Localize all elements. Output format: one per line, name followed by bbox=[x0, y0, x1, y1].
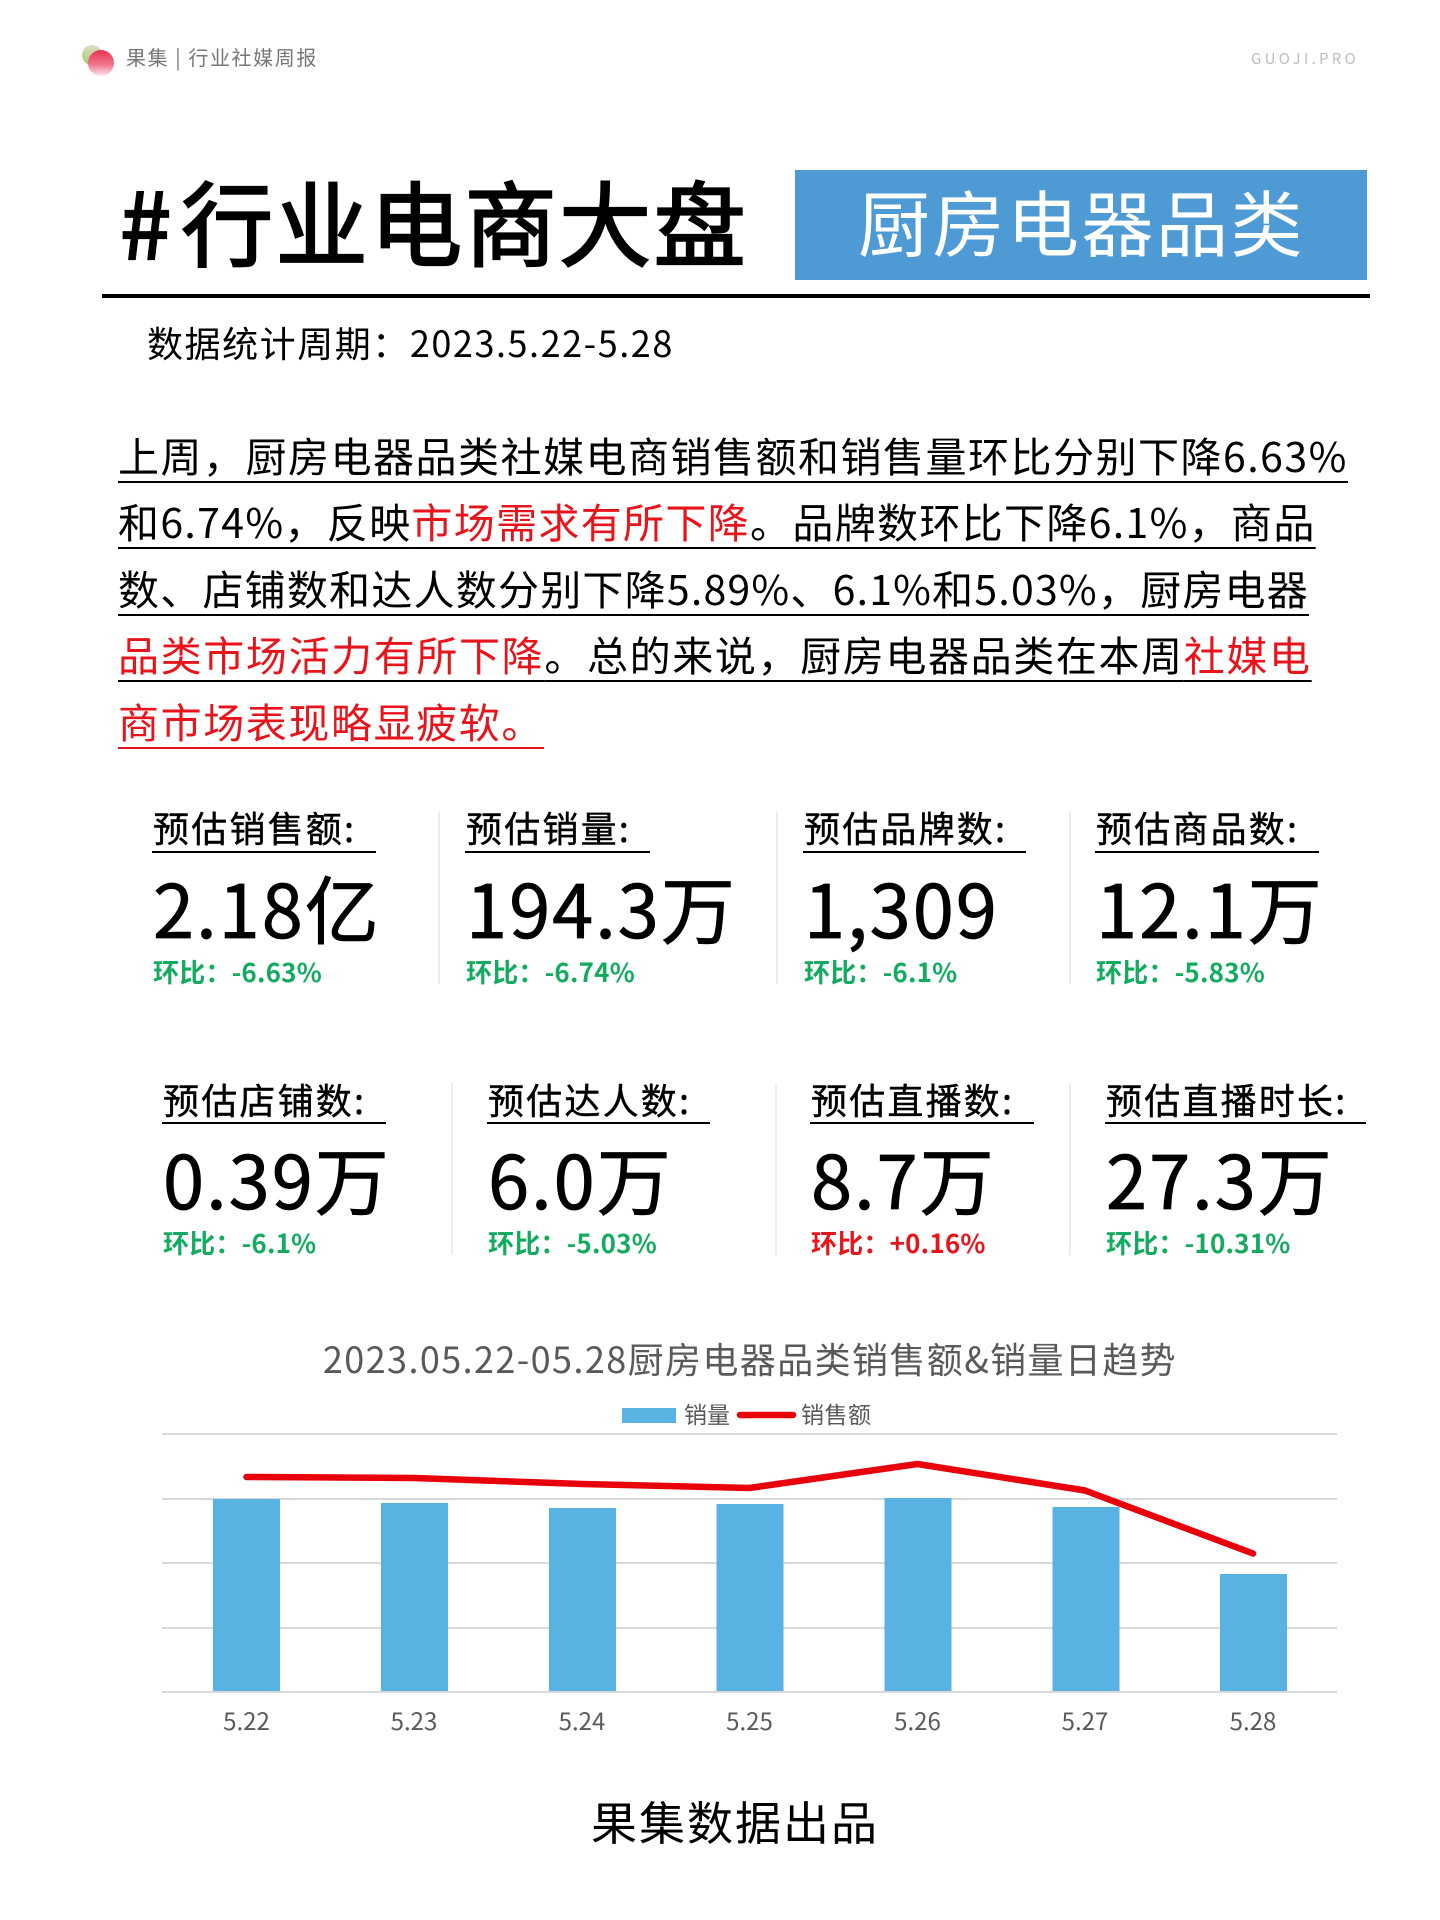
title: #行业电商大盘 bbox=[120, 153, 748, 286]
stat: stores bbox=[162, 1073, 391, 1261]
stat: live streams: 预估直播数: bbox=[811, 1073, 1014, 1125]
stat: live duration: 预估直播时长: bbox=[1106, 1073, 1347, 1125]
stat: products: 环比：-5.83% bbox=[1096, 953, 1265, 990]
x axis labels: 5.26 bbox=[894, 1702, 941, 1737]
line 5: 商市场表现略显疲软。 bbox=[118, 690, 544, 750]
stat: products: 预估商品数: bbox=[1096, 801, 1299, 853]
stat: brands: 1,309 bbox=[804, 853, 999, 960]
stat: stores: 预估店铺数: bbox=[163, 1073, 366, 1125]
stat: sales amount: 2.18亿 bbox=[153, 853, 381, 960]
chart title: 2023.05.22-05.28厨房电器品类销售额&销量日趋势 bbox=[323, 1332, 1177, 1384]
x axis labels: 5.28 bbox=[1230, 1702, 1276, 1737]
stat: live streams: 环比：+0.16% bbox=[811, 1224, 986, 1261]
stat: live duration bbox=[1105, 1073, 1366, 1261]
legend: 销售额 bbox=[801, 1396, 872, 1430]
x axis labels: 5.22 bbox=[223, 1702, 270, 1737]
summary paragraph bbox=[118, 424, 1348, 750]
stat: products: 12.1万 bbox=[1096, 853, 1324, 960]
site url: GUOJI.PRO bbox=[1251, 48, 1359, 69]
stat: influencers: 6.0万 bbox=[488, 1124, 673, 1231]
header brand: logo and name bbox=[82, 42, 318, 76]
legend bbox=[622, 1396, 872, 1430]
stat: sales volume: 194.3万 bbox=[466, 853, 737, 960]
stat: brands: 预估品牌数: bbox=[804, 801, 1007, 853]
stat: stores: 环比：-6.1% bbox=[163, 1224, 316, 1261]
x axis labels: 5.23 bbox=[391, 1702, 437, 1737]
line 3: 数、店铺数和达人数分别下降5.89%、6.1%和5.03%，厨房电器 bbox=[118, 557, 1309, 617]
stat: influencers bbox=[487, 1073, 710, 1261]
stat: brands bbox=[803, 801, 1026, 990]
x axis labels bbox=[223, 1702, 1276, 1737]
category tag bbox=[795, 170, 1367, 280]
bars: sales volume bbox=[213, 1498, 1287, 1691]
stat: live duration: 27.3万 bbox=[1106, 1124, 1334, 1231]
stat: sales volume: 环比：-6.74% bbox=[466, 953, 635, 990]
date range: 数据统计周期：2023.5.22-5.28 bbox=[147, 316, 674, 368]
stat: brands: 环比：-6.1% bbox=[804, 953, 957, 990]
stat: stores: 0.39万 bbox=[163, 1124, 391, 1231]
x axis labels: 5.24 bbox=[559, 1702, 605, 1737]
line 4: 品类市场活力有所下降。总的来说，厨房电器品类在本周社媒电 bbox=[118, 623, 1312, 683]
line 2: 和6.74%，反映市场需求有所下降。品牌数环比下降6.1%，商品 bbox=[118, 490, 1316, 550]
line 1: 上周，厨房电器品类社媒电商销售额和销售量环比分别下降6.63% bbox=[118, 424, 1348, 484]
stat: sales volume bbox=[465, 801, 737, 990]
x axis labels: 5.25 bbox=[726, 1702, 773, 1737]
line: sales amount bbox=[246, 1464, 1253, 1554]
stat: sales amount bbox=[152, 801, 381, 990]
stat: live duration: 环比：-10.31% bbox=[1106, 1224, 1290, 1261]
footer credit: 果集数据出品 bbox=[591, 1788, 879, 1854]
stat: live streams: 8.7万 bbox=[811, 1124, 996, 1231]
stat: influencers: 环比：-5.03% bbox=[488, 1224, 657, 1261]
stat: influencers: 预估达人数: bbox=[488, 1073, 691, 1125]
stat: products bbox=[1095, 801, 1324, 990]
icon: guoji logo bbox=[82, 45, 114, 76]
stat: sales amount: 环比：-6.63% bbox=[153, 953, 322, 990]
stat: sales amount: 预估销售额: bbox=[153, 801, 356, 853]
x axis labels: 5.27 bbox=[1062, 1702, 1108, 1737]
stat: sales volume: 预估销量: bbox=[466, 801, 631, 853]
category text: 厨房电器品类 bbox=[858, 167, 1305, 272]
legend: 销量 bbox=[684, 1396, 730, 1430]
chart: daily sales trend bbox=[162, 1332, 1337, 1737]
stat: live streams bbox=[810, 1073, 1034, 1261]
brand text: 果集 | 行业社媒周报 bbox=[126, 42, 318, 71]
